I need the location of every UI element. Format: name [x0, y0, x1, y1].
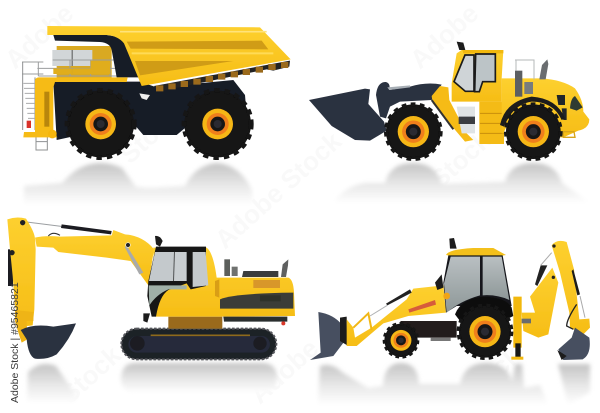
rear wheel — [459, 305, 511, 358]
dump body teeth — [154, 61, 290, 92]
background watermarks: Stock — [54, 339, 127, 409]
wheels — [386, 104, 441, 159]
backhoe loader — [310, 238, 590, 360]
chassis — [53, 80, 247, 140]
front wheel — [384, 324, 418, 357]
reflection: excavator — [27, 363, 277, 403]
chassis — [400, 321, 457, 338]
center steps — [479, 102, 504, 144]
background watermarks: Adobe Stock — [209, 125, 348, 254]
stabilizer — [513, 297, 522, 348]
cab lower panels — [53, 61, 110, 74]
engine top parts — [224, 259, 230, 276]
background watermarks: Adobe — [244, 333, 324, 409]
cab and rail — [22, 46, 122, 150]
cab — [452, 50, 503, 102]
wheel loader — [309, 42, 589, 159]
upper body — [153, 248, 295, 317]
cab — [446, 248, 506, 256]
front wheel — [67, 90, 134, 158]
background watermarks: Stock — [454, 339, 527, 409]
tracks — [121, 329, 276, 359]
arm yellow — [432, 86, 473, 142]
exhaust and rails — [515, 60, 534, 79]
background watermarks: Stock — [114, 99, 187, 169]
background watermarks: Stock — [424, 124, 497, 194]
rear bucket — [558, 328, 590, 360]
cab yellow deck — [23, 77, 128, 137]
rear wheel — [184, 90, 251, 158]
reflection: dump truck — [24, 163, 252, 205]
excavator — [7, 217, 295, 359]
dump body — [47, 26, 291, 86]
background watermarks: Adobe — [404, 0, 484, 74]
cab glass — [147, 247, 206, 317]
loader arm — [347, 285, 446, 346]
bucket and arm — [309, 82, 442, 141]
bucket — [21, 323, 76, 359]
reflection: backhoe loader — [318, 363, 590, 405]
dump truck — [22, 26, 291, 158]
backhoe boom — [522, 268, 558, 338]
front bucket — [310, 312, 346, 360]
boom — [35, 230, 154, 285]
stock id caption: Adobe Stock | #95465821 — [9, 282, 21, 403]
rear fender — [455, 297, 513, 321]
dipper arm — [8, 249, 13, 286]
reflection: wheel loader — [333, 163, 590, 203]
engine hood — [502, 78, 589, 137]
